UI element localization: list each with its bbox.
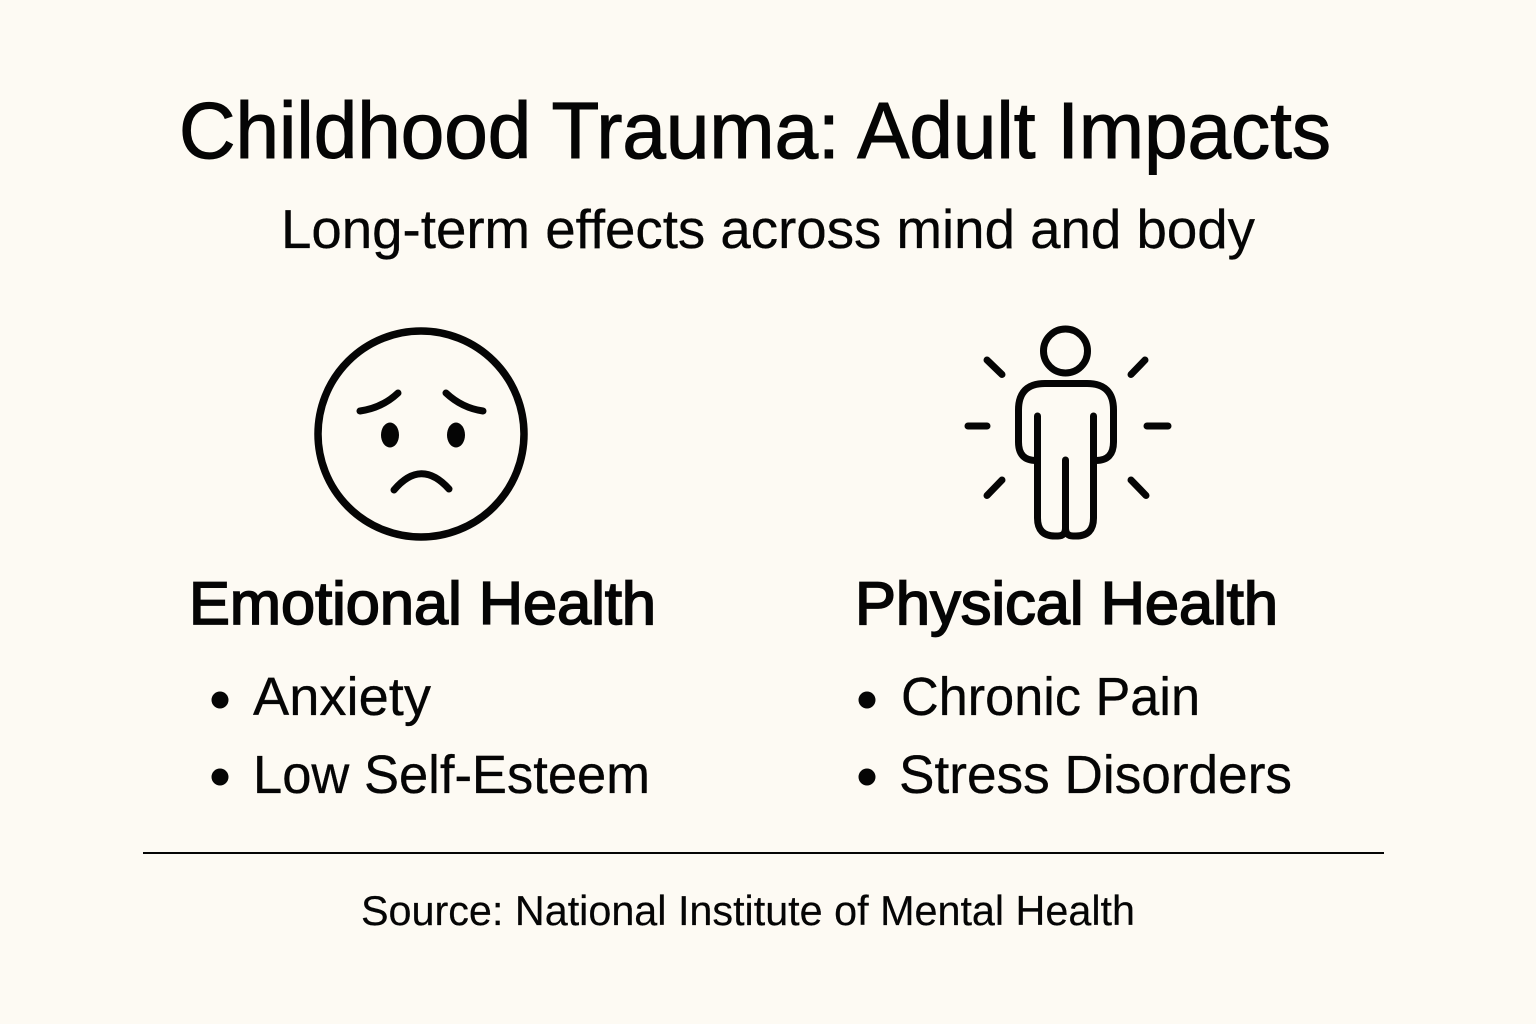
source note: Source: National Institute of Mental Health [361,887,1135,934]
list: physical effects: Chronic Pain [901,667,1200,727]
heading: emotional health: Emotional Health [189,570,656,637]
list: physical effects: Stress Disorders [899,745,1292,805]
title: Childhood Trauma: Adult Impacts [179,86,1331,175]
panel: physical health [855,329,1292,805]
icon: sad face [318,331,524,537]
list: emotional effects [212,667,650,805]
list: physical effects [858,667,1292,805]
heading: physical health: Physical Health [855,570,1278,637]
subtitle: Long-term effects across mind and body [281,198,1255,260]
panel: emotional health [189,331,656,805]
list: emotional effects: Low Self-Esteem [253,745,650,805]
list: emotional effects: Anxiety [253,667,431,727]
icon: person with radiating pain lines [968,329,1168,536]
